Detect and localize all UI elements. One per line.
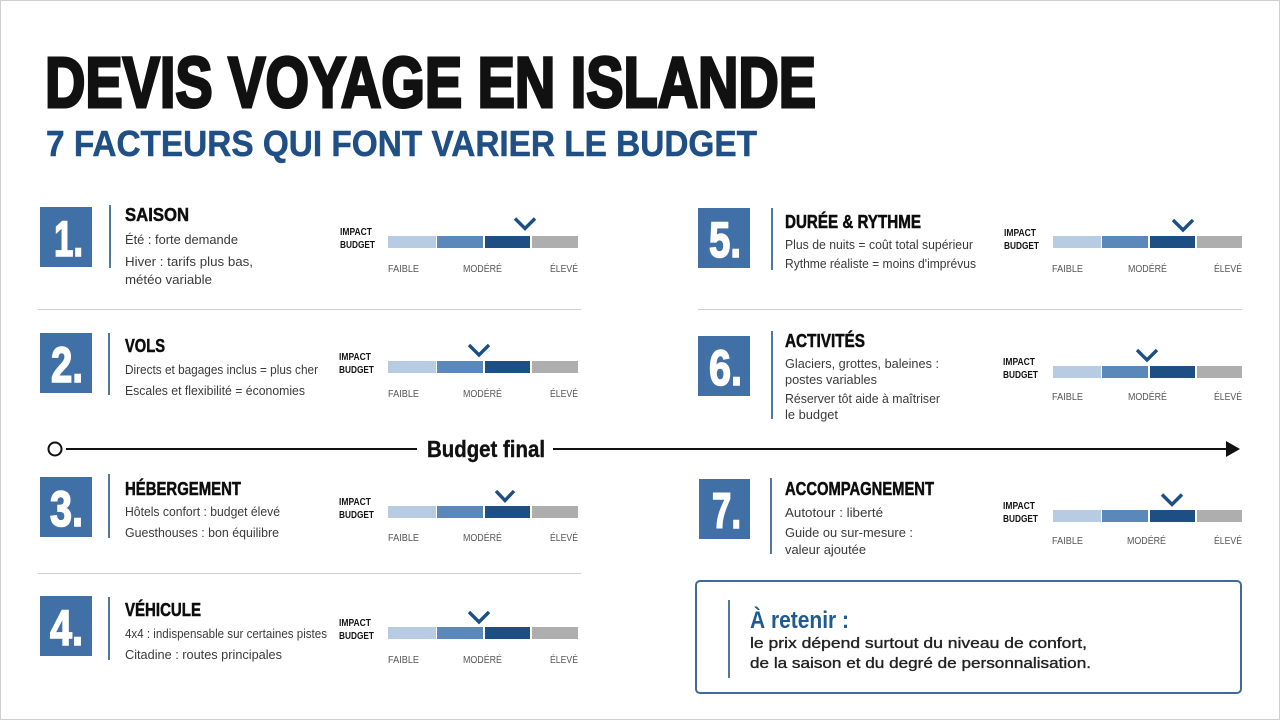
impact gauge 6: ÉLEVÉ xyxy=(1214,390,1242,403)
impact gauge 1 xyxy=(340,218,578,275)
text block: vols: Directs et bagages inclus = plus cher xyxy=(125,363,318,377)
text block: saison: météo variable xyxy=(125,273,212,287)
text block: activites: Réserver tôt aide à maîtriser xyxy=(785,392,940,406)
text block: hebergement: Hôtels confort : budget élevé xyxy=(125,505,280,519)
impact gauge 7: FAIBLE xyxy=(1052,536,1083,547)
impact gauge 1: ÉLEVÉ xyxy=(550,262,578,275)
impact gauge 5: FAIBLE xyxy=(1052,264,1083,275)
impact gauge 6: MODÉRÉ xyxy=(1128,390,1167,403)
text block: duree et rythme: Rythme réaliste = moins d'imprévus xyxy=(785,257,976,271)
impact gauge 6 xyxy=(1003,350,1242,403)
number badge 1 xyxy=(40,207,92,267)
number badge 5: 5. xyxy=(709,212,741,268)
text block: duree et rythme: Plus de nuits = coût total supérieur xyxy=(785,238,973,252)
text block: accompagnement: Guide ou sur-mesure : xyxy=(785,526,913,540)
panel: factor 1 saison xyxy=(40,205,578,287)
impact gauge 4: MODÉRÉ xyxy=(463,653,502,666)
text block: saison: Été : forte demande xyxy=(125,232,238,247)
callout text xyxy=(750,635,1091,672)
callout: a retenir xyxy=(696,581,1241,693)
impact gauge 6: BUDGET xyxy=(1003,370,1038,381)
impact gauge 2 xyxy=(339,345,578,400)
number badge 4: 4. xyxy=(50,600,83,656)
heading: saison: SAISON xyxy=(125,205,189,225)
impact gauge 4 xyxy=(339,612,578,666)
callout heading: À retenir : xyxy=(750,606,849,634)
heading: duree et rythme: DURÉE & RYTHME xyxy=(785,211,921,232)
number badge 6: 6. xyxy=(709,340,742,396)
impact gauge 2: MODÉRÉ xyxy=(463,387,502,400)
text block: duree et rythme xyxy=(785,238,976,271)
heading: activites: ACTIVITÉS xyxy=(785,330,865,351)
impact gauge 3: BUDGET xyxy=(339,510,374,521)
impact gauge 5 xyxy=(1004,220,1242,275)
text block: hebergement xyxy=(125,505,280,540)
impact gauge 7 xyxy=(1003,494,1242,547)
impact gauge 4: IMPACT xyxy=(339,618,371,629)
text block: vols: Escales et flexibilité = économies xyxy=(125,384,305,398)
impact gauge 2: IMPACT xyxy=(339,352,371,363)
impact gauge 7: IMPACT xyxy=(1003,501,1035,512)
text block: vehicule: Citadine : routes principales xyxy=(125,648,282,662)
number badge 7: 7. xyxy=(712,483,741,539)
heading: hebergement: HÉBERGEMENT xyxy=(125,478,241,499)
impact gauge 2: ÉLEVÉ xyxy=(550,387,578,400)
panel: factor 6 activites xyxy=(698,330,1242,422)
arrow: budget final timeline xyxy=(48,436,1240,462)
impact gauge 5: BUDGET xyxy=(1004,241,1039,252)
number badge 1: 1. xyxy=(54,211,83,267)
impact gauge 4: ÉLEVÉ xyxy=(550,653,578,666)
impact gauge 3 xyxy=(339,491,578,544)
impact gauge 5: IMPACT xyxy=(1004,228,1036,239)
impact gauge 7: ÉLEVÉ xyxy=(1214,534,1242,547)
impact gauge 4: BUDGET xyxy=(339,631,374,642)
text block: activites: Glaciers, grottes, baleines : xyxy=(785,357,939,371)
impact gauge 6: IMPACT xyxy=(1003,357,1035,368)
panel: factor 5 duree et rythme xyxy=(698,208,1242,275)
callout text: le prix dépend surtout du niveau de confort, xyxy=(750,635,1087,652)
impact gauge 3: FAIBLE xyxy=(388,533,419,544)
panel: factor 3 hebergement xyxy=(40,474,578,544)
impact gauge 4: FAIBLE xyxy=(388,655,419,666)
heading: vehicule: VÉHICULE xyxy=(125,599,201,620)
panel: factor 4 vehicule xyxy=(40,596,578,666)
impact gauge 7: MODÉRÉ xyxy=(1127,534,1166,547)
impact gauge 3: MODÉRÉ xyxy=(463,531,502,544)
text block: hebergement: Guesthouses : bon équilibre xyxy=(125,526,279,540)
text block: activites: le budget xyxy=(785,408,839,422)
heading: vols: VOLS xyxy=(125,336,165,356)
text block: vols xyxy=(125,363,318,398)
impact gauge 1: FAIBLE xyxy=(388,264,419,275)
impact gauge 1: IMPACT xyxy=(340,227,372,238)
impact gauge 1: BUDGET xyxy=(340,240,375,251)
impact gauge 7: BUDGET xyxy=(1003,514,1038,525)
heading: accompagnement: ACCOMPAGNEMENT xyxy=(785,479,934,499)
impact gauge 3: IMPACT xyxy=(339,497,371,508)
text block: vehicule xyxy=(125,627,327,662)
text block: accompagnement xyxy=(785,506,913,557)
impact gauge 5: ÉLEVÉ xyxy=(1214,262,1242,275)
impact gauge 1: MODÉRÉ xyxy=(463,262,502,275)
text block: accompagnement: Autotour : liberté xyxy=(785,506,883,520)
subtitle: 7 FACTEURS QUI FONT VARIER LE BUDGET xyxy=(46,123,757,164)
impact gauge 5: MODÉRÉ xyxy=(1128,262,1167,275)
text block: activites xyxy=(785,357,940,422)
impact gauge 6: FAIBLE xyxy=(1052,392,1083,403)
number badge 3: 3. xyxy=(50,481,83,537)
number badge 2: 2. xyxy=(51,337,83,393)
text block: vehicule: 4x4 : indispensable sur certaines pistes xyxy=(125,627,327,641)
impact gauge 2: BUDGET xyxy=(339,365,374,376)
panel: factor 7 accompagnement xyxy=(699,478,1242,557)
text block: saison xyxy=(125,232,253,287)
text block: activites: postes variables xyxy=(785,373,877,387)
text block: saison: Hiver : tarifs plus bas, xyxy=(125,255,253,269)
callout text: de la saison et du degré de personnalisation. xyxy=(750,655,1091,672)
arrow: budget final timeline: Budget final xyxy=(427,436,545,462)
impact gauge 2: FAIBLE xyxy=(388,389,419,400)
number badge 7 xyxy=(699,479,750,539)
text block: accompagnement: valeur ajoutée xyxy=(785,543,866,557)
impact gauge 3: ÉLEVÉ xyxy=(550,531,578,544)
panel: factor 2 vols xyxy=(40,333,578,400)
title: DEVIS VOYAGE EN ISLANDE xyxy=(45,44,816,123)
